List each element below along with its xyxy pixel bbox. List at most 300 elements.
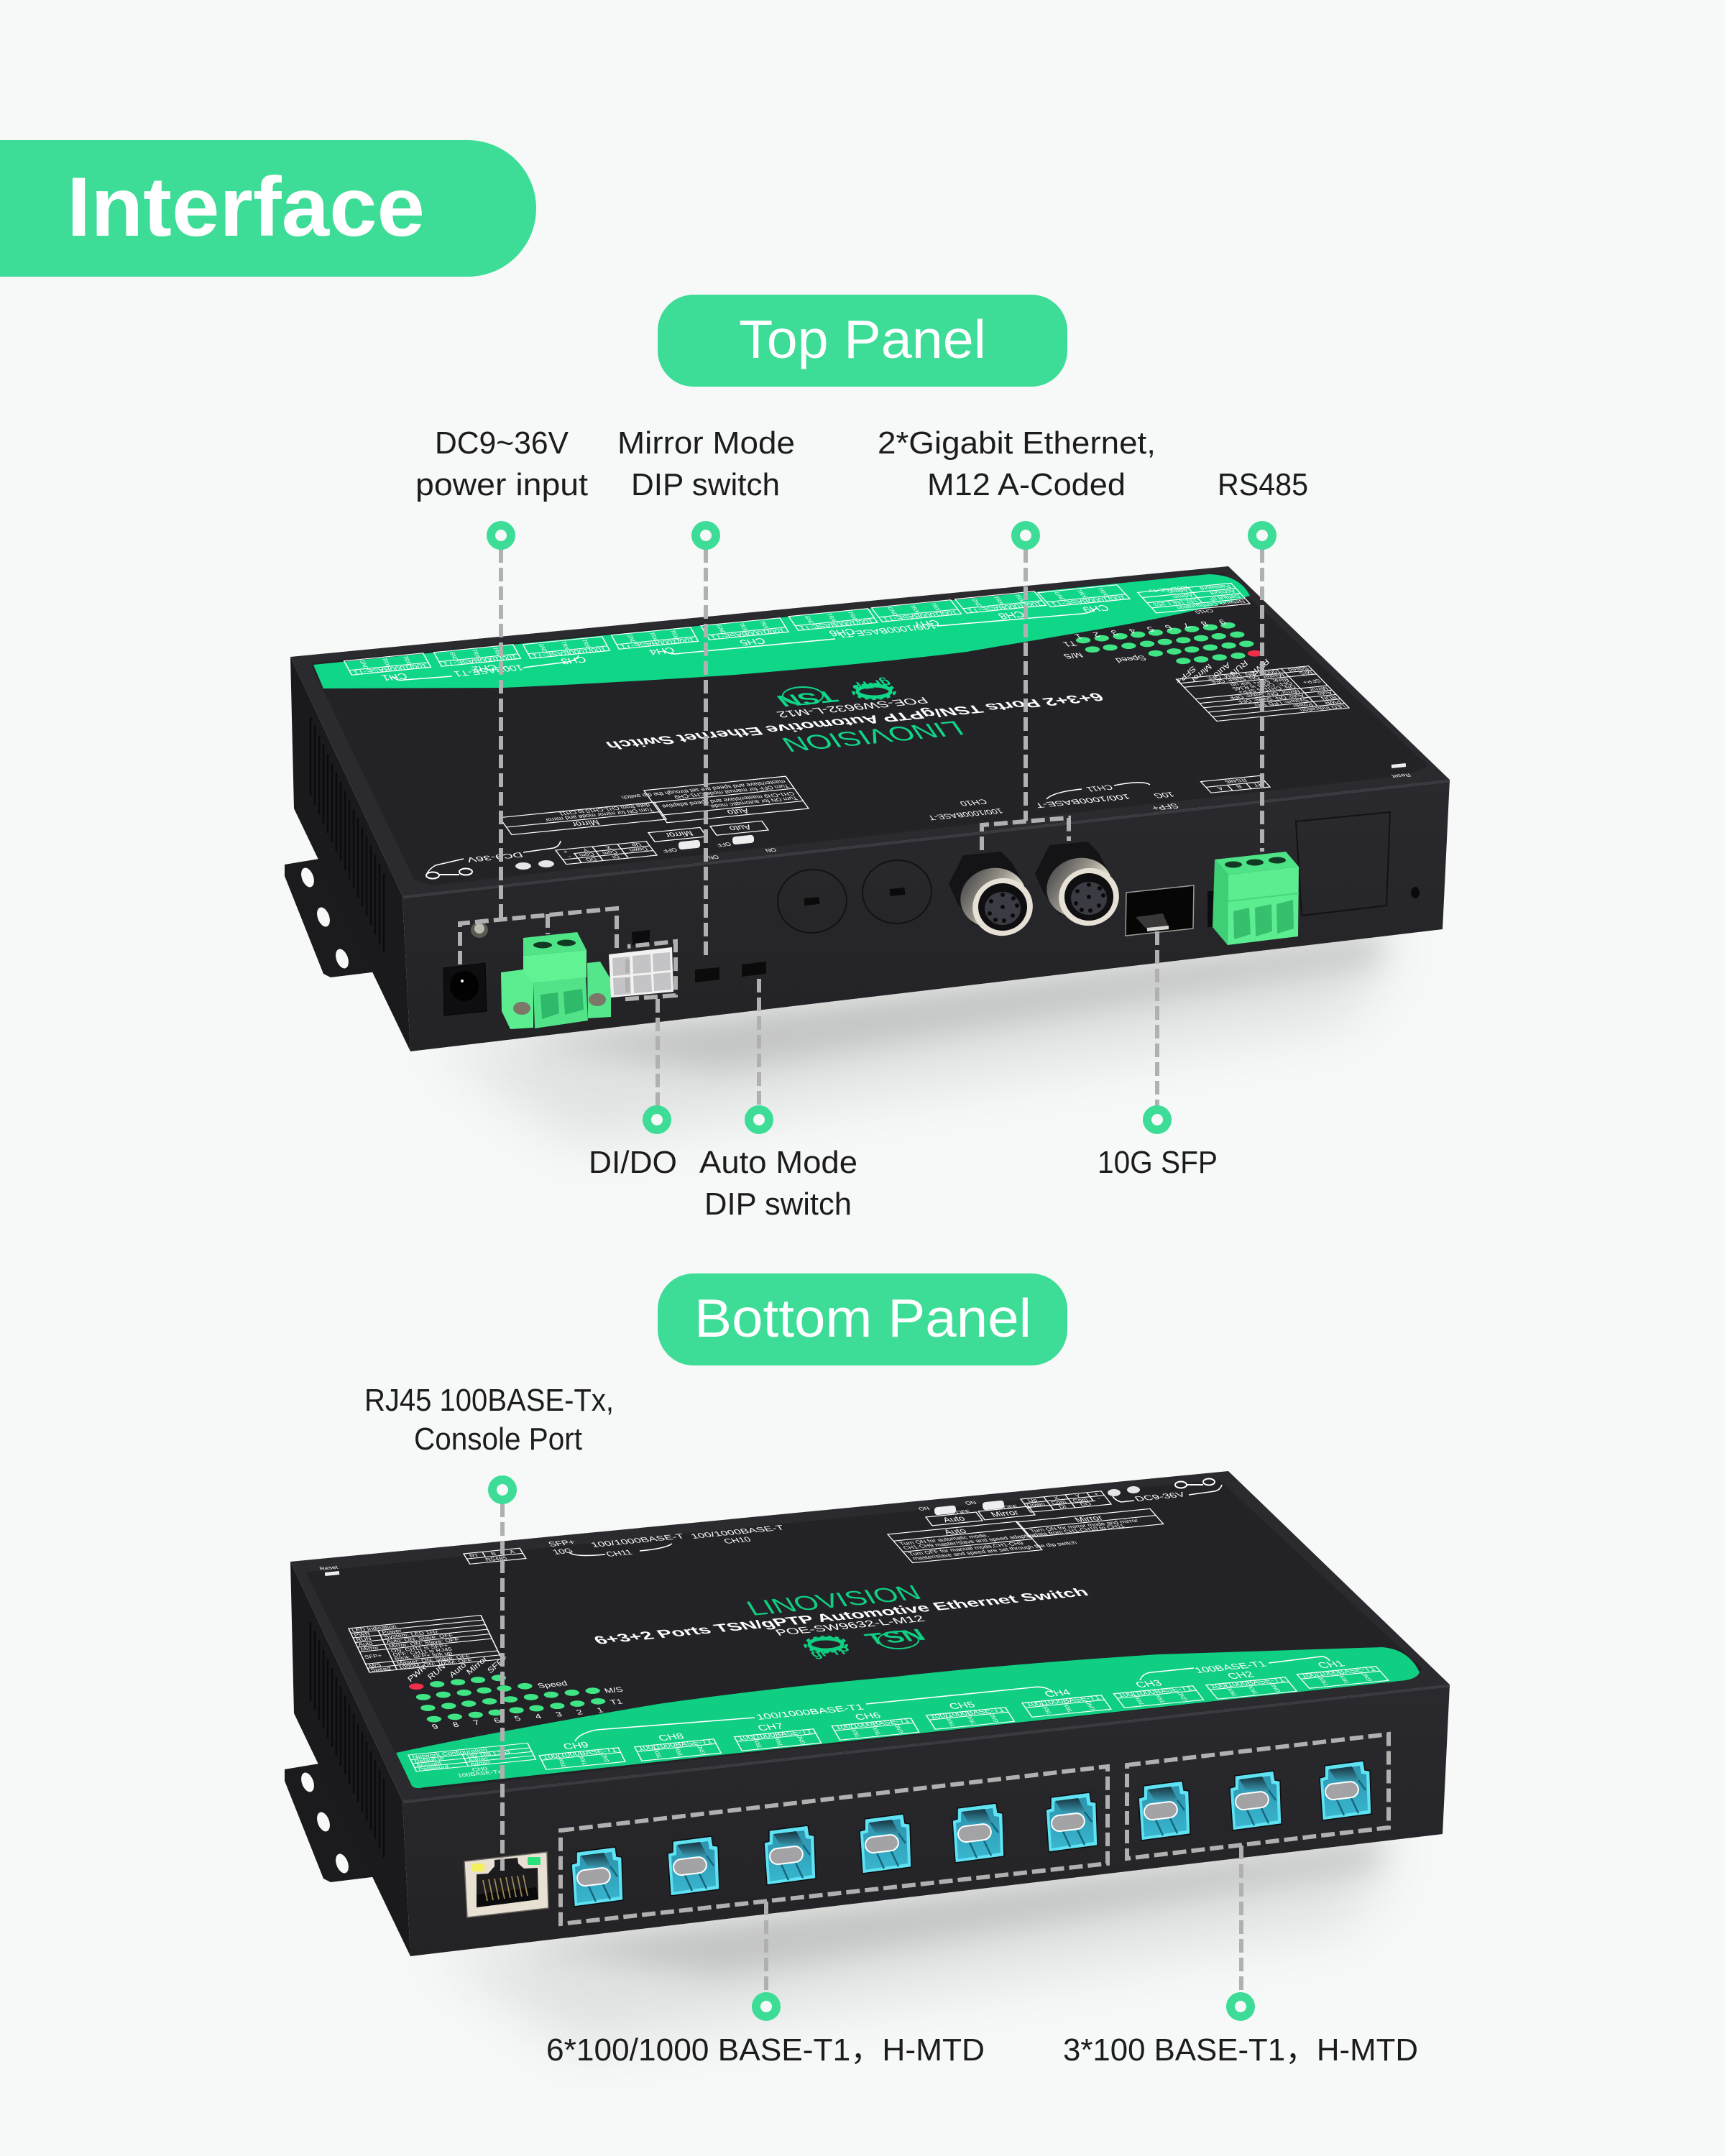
power polarity symbol <box>426 868 472 878</box>
CH6: 100/1000BASE-T1 <box>834 1718 911 1731</box>
CH8: TRX+ <box>1013 594 1029 605</box>
LED indication table: Blink: SFP+ link up <box>1228 677 1291 688</box>
CH3: TRX+ <box>580 639 593 650</box>
side face with vents <box>290 1562 410 1956</box>
DI/DO terminal table: X <box>604 845 612 850</box>
terminal dots <box>515 860 554 870</box>
RS485 table <box>1201 775 1270 793</box>
floor shadow <box>431 934 1402 1143</box>
CH4: 100/1000BASE-T1 <box>619 636 696 650</box>
label: 2*Gigabit Ethernet, M12 A-Coded: M12 A-Coded <box>927 467 1126 502</box>
LED indication table: Mirror <box>359 1644 380 1651</box>
tag: Mirror: Mirror <box>988 1508 1021 1519</box>
H-MTD connector CH1 <box>1320 1761 1371 1820</box>
CH9: CH9 <box>562 1741 590 1751</box>
Mirror table: data from CH1-CH10 to CH11 <box>558 802 652 816</box>
text: CH0 100BASE-Tx: CH0 <box>471 1766 489 1772</box>
CH7 <box>729 1719 821 1751</box>
DI/DO terminal table: DO <box>1079 1501 1093 1507</box>
RS485 table: RS485 <box>1223 778 1248 784</box>
CH6 <box>826 1708 919 1740</box>
dashed box: DI/DO <box>627 941 676 999</box>
CH8 <box>629 1729 721 1761</box>
CH4: TRX+ <box>668 630 681 641</box>
LED indication table: PWR <box>353 1631 371 1638</box>
band brace: 100/1000BASE-T1: 100/1000BASE-T1 <box>835 621 939 639</box>
LED indication table: RUN <box>355 1636 372 1642</box>
CH8 <box>955 591 1054 623</box>
text: 100/1000BASE-T ports: CH10 <box>722 1536 753 1545</box>
CH9: TRX+ <box>556 1756 568 1767</box>
H-MTD connector CH9 <box>571 1847 623 1907</box>
DI/DO terminal table: DO <box>584 857 598 862</box>
title banner: Interface: Interface <box>67 160 425 254</box>
CH2: TRX- <box>470 649 483 659</box>
DI/DO terminal table: Com <box>1071 1497 1090 1503</box>
label: DI/DO: DI/DO <box>589 1145 677 1180</box>
power label: DC9-36V <box>427 841 561 874</box>
dashed bracket: M12 <box>982 818 1069 850</box>
CH9: TRX+ <box>1095 587 1112 599</box>
heading: Bottom Panel <box>658 1273 1067 1365</box>
text: 100/1000BASE-T ports: 100/1000BASE-T <box>1033 793 1133 810</box>
product title: 6+3+2 Ports TSN/gPTP Automotive Ethernet Switch <box>590 1585 1092 1646</box>
icon: gPTP: gPTP <box>807 1645 855 1659</box>
H-MTD connector CH8 <box>668 1836 719 1896</box>
LED indication table: Master: ON; Slave: OFF <box>1208 673 1287 685</box>
label: Mirror Mode DIP switch <box>617 425 795 502</box>
blank panel pegs <box>804 887 1420 906</box>
LED number labels: 987654321 <box>431 1706 605 1731</box>
text: ON OFF: ON <box>964 1500 978 1506</box>
text: ON OFF: OFF <box>1002 1503 1019 1510</box>
LED indication table: System: LED 1Hz <box>1252 698 1310 708</box>
CH7: TRX+ <box>929 602 944 614</box>
text: SFP+ 10G: 10G <box>551 1547 575 1556</box>
LED status labels: PWR <box>1248 657 1271 678</box>
dot: Mirror <box>696 525 716 545</box>
CH7: TRX- <box>908 604 922 614</box>
Auto table: CH1-CH9 master/slave and speed adaptive <box>661 791 796 809</box>
CH5: GND <box>988 1713 1000 1723</box>
leader: console port <box>500 1503 505 1871</box>
network configuration table <box>1138 583 1255 618</box>
network configuration table <box>408 1743 536 1772</box>
title banner: Interface <box>0 140 536 277</box>
LED row label: Speed: Speed <box>536 1680 569 1690</box>
text: ON OFF: OFF <box>954 1508 972 1515</box>
text: SFP+ 10G: SFP+ <box>1149 802 1181 812</box>
CH8: CH8 <box>657 1731 686 1743</box>
text: ON OFF: OFF <box>661 847 678 854</box>
label: 3*100 BASE-T1, H-MTD: 3*100 BASE-T1，H-MTD <box>1063 2032 1418 2068</box>
text: 100/1000BASE-T ports: 100/1000BASE-T <box>589 1532 686 1549</box>
power label: DC9-36V: DC9-36V <box>464 851 525 864</box>
LED indication table: Mirror: ON; Slave: OFF <box>387 1636 460 1649</box>
port: power terminal block <box>501 932 611 1029</box>
label: Mirror Mode DIP switch: Mirror Mode <box>617 425 795 461</box>
H-MTD connector CH6 <box>860 1814 911 1874</box>
label: DC9~36V power input: power input <box>415 467 588 502</box>
CH2: TRX- <box>1246 1685 1260 1695</box>
CH7 <box>871 600 969 632</box>
dashed bracket: power <box>460 908 617 964</box>
LED status labels: RUN <box>1228 658 1249 678</box>
H-MTD connector CH4 <box>1046 1792 1098 1852</box>
CH1: TRX- <box>380 658 393 668</box>
CH9 <box>1038 585 1139 617</box>
leader: RS485 <box>1260 549 1264 852</box>
text: 100/1000BASE-T ports: 100/1000BASE-T <box>926 807 1006 822</box>
label: DC9~36V power input: DC9~36V <box>435 425 569 461</box>
heading: Top Panel <box>658 295 1067 387</box>
CH7: GND <box>795 1734 807 1744</box>
LED indication table: RUN <box>1319 695 1338 701</box>
LED matrix <box>409 1674 605 1722</box>
dot: M12 <box>1016 525 1036 545</box>
network configuration table: CH10 <box>1193 608 1215 614</box>
DI/DO terminal table: X <box>1052 1495 1061 1501</box>
Auto table: Turn ON for automatic mode, <box>707 796 799 809</box>
DI/DO terminal table: DI <box>1057 1503 1068 1509</box>
dot: six ports <box>756 1996 776 2017</box>
CH3: TRX- <box>559 641 572 651</box>
LED indication table: Power <box>1291 702 1315 709</box>
label: RJ45 100BASE-Tx, Console Port: RJ45 100BASE-Tx, <box>364 1383 614 1418</box>
Auto table: CH1-CH9 master/slave and speed adaptive <box>901 1532 1037 1551</box>
LED indication table: Auto: ON; Slave: OFF <box>385 1632 454 1644</box>
CH9: CH9 <box>1080 603 1112 614</box>
DI/DO terminal table: Up <box>630 842 643 848</box>
DI/DO terminal table: DI <box>610 854 621 860</box>
leader: six ports <box>764 1902 768 2007</box>
LED indication table: SFP+ <box>363 1653 383 1659</box>
CH1: 100/1000BASE-T1 <box>351 662 428 676</box>
network configuration table: Network Configuration <box>1174 599 1247 610</box>
channel labels <box>535 1657 1389 1769</box>
CH4: GND <box>625 634 638 644</box>
RS485 table: RT <box>1251 782 1265 788</box>
CH5: CH5 <box>737 636 768 647</box>
RS485 table: RS485 <box>484 1555 508 1562</box>
LED status labels: RUN <box>426 1662 447 1682</box>
text: SFP+ 10G: SFP+ <box>547 1539 577 1548</box>
tag: Auto: Auto <box>940 1514 967 1524</box>
dot: SFP <box>1147 1110 1167 1130</box>
LED indication table: Mirror <box>1307 686 1330 692</box>
switch icon: Auto <box>934 1505 957 1516</box>
Mirror table <box>499 801 666 835</box>
grounding screw <box>471 922 488 938</box>
top face <box>290 566 1450 896</box>
tag: Mirror <box>648 827 707 842</box>
CH4: TRX- <box>648 632 661 642</box>
CH1: GND <box>358 660 370 670</box>
power label: DC9-36V: DC9-36V <box>1132 1491 1187 1503</box>
power polarity symbol <box>1175 1479 1215 1488</box>
heading: Top Panel: Top Panel <box>739 309 986 369</box>
network configuration table: Default IP <box>1208 594 1242 602</box>
CH7: TRX- <box>772 1736 785 1746</box>
band brace: 100/1000BASE-T1 <box>575 1687 1053 1741</box>
DI/DO terminal table: - <box>567 854 573 859</box>
LED status labels: SFP+ <box>486 1653 510 1675</box>
network configuration table: 192.168.1.253 <box>465 1750 512 1759</box>
CH3: GND <box>1175 1691 1190 1701</box>
text: ON OFF: ON <box>764 847 778 853</box>
LED status labels: Mirror <box>465 1654 489 1677</box>
DI/DO terminal table: Y <box>581 847 589 853</box>
CH4: 100/1000BASE-T1 <box>1024 1695 1102 1708</box>
icon: gPTP <box>805 1637 855 1659</box>
leader: Mirror Mode DIP <box>704 549 708 958</box>
label: Auto Mode DIP switch: Auto Mode <box>699 1145 857 1180</box>
label plate <box>309 1482 1420 1788</box>
CH8: TRX- <box>673 1746 685 1756</box>
LED status labels: PWR <box>406 1662 428 1684</box>
icon: TSN: TSN <box>860 1626 930 1649</box>
icon: gPTP: gPTP <box>847 677 896 692</box>
CH7: 100/1000BASE-T1 <box>737 1728 814 1742</box>
CH6: TRX- <box>870 1726 883 1736</box>
text: 100BASE-Tx: 100BASE-Tx <box>1146 585 1191 594</box>
network configuration table: 192.168.1.253 <box>1151 598 1200 607</box>
text: SFP+ 10G <box>1149 791 1181 812</box>
front face <box>402 780 1450 1051</box>
tag: Auto: Auto <box>727 823 753 833</box>
LED status labels: Auto <box>448 1660 468 1680</box>
LED indication table: Speed <box>1286 665 1310 673</box>
label plate <box>313 575 1425 883</box>
LED indication table: Mirror: ON; Slave: OFF <box>1227 688 1302 701</box>
LED status labels <box>1174 657 1271 686</box>
callouts: top panel leaders <box>460 525 1272 1130</box>
CH4 <box>1015 1685 1111 1717</box>
icon: TSN: TSN <box>772 687 842 710</box>
band brace: 100/1000BASE-T1 <box>664 607 1097 654</box>
port: RJ45 console <box>464 1852 548 1917</box>
CH9: 100/1000BASE-T1 <box>541 1747 618 1761</box>
text: ON OFF: ON <box>917 1506 931 1511</box>
Auto table: Turn OFF for manual mode,CH1-CH9 <box>907 1540 1025 1557</box>
text: 100/1000BASE-T ports: CH11 <box>604 1549 634 1558</box>
label: Mirror Mode DIP switch: DIP switch <box>631 467 780 502</box>
CH7: TRX+ <box>751 1737 764 1749</box>
LED status labels <box>406 1653 510 1684</box>
LED matrix <box>1076 622 1262 664</box>
label: Auto Mode DIP switch: DIP switch <box>704 1187 852 1222</box>
port: M12 connector 2 <box>1035 842 1126 933</box>
blank panel outlines <box>775 812 1390 936</box>
CH2: GND <box>1268 1682 1282 1692</box>
CH5: 100/1000BASE-T1 <box>709 627 786 640</box>
CH6: GND <box>803 615 816 625</box>
CH5: 100/1000BASE-T1 <box>929 1707 1006 1720</box>
DI/DO terminal table: Com <box>601 849 619 856</box>
CH5 <box>920 1697 1014 1729</box>
LED indication table: SFP+ <box>1301 678 1322 685</box>
DIP switch: Mirror <box>695 967 719 982</box>
Mirror table: Mirror <box>1072 1514 1105 1524</box>
LED indication table: Master: ON; Slave: OFF <box>395 1653 472 1666</box>
tag: Mirror: Mirror <box>663 829 695 839</box>
product title: 6+3+2 Ports TSN/gPTP Automotive Ethernet Switch <box>602 691 1108 752</box>
tag: Auto <box>710 821 768 835</box>
text: ON OFF: ON <box>707 854 720 860</box>
text: ON OFF <box>661 842 778 860</box>
CH5 <box>701 618 795 650</box>
CH5: TRX+ <box>758 620 772 632</box>
LED indication table: OFF: CH11 is RJ45 <box>1230 681 1294 691</box>
product model: POE-SW9632-L-M12 <box>774 695 931 719</box>
network configuration table: Account <box>415 1761 443 1768</box>
port: DI/DO white connector <box>609 930 673 998</box>
LED indication table: 1000M: ON; 100M: OFF <box>397 1657 473 1670</box>
Mirror table: Turn ON for mirror mode and mirror <box>1028 1518 1140 1534</box>
CH3: 100/1000BASE-T1 <box>530 645 607 659</box>
CH3 <box>523 637 615 668</box>
LED status labels: SFP+ <box>1174 664 1197 686</box>
Mirror table: Turn ON for mirror mode and mirror <box>544 807 655 823</box>
CH9: GND <box>599 1753 611 1763</box>
LED number labels: 123456789 <box>1072 618 1228 640</box>
CH5: TRX+ <box>943 1715 957 1727</box>
CH6: CH6 <box>827 627 857 637</box>
CH1: TRX+ <box>1315 1674 1331 1686</box>
green band <box>396 1647 1420 1788</box>
tag: Auto <box>926 1512 983 1526</box>
product logo: LINOVISION: LINOVISION <box>742 1581 926 1620</box>
dot: RS485 <box>1252 525 1272 545</box>
leader: three ports <box>1239 1846 1243 2007</box>
text: SFP+ 10G: 10G <box>1151 791 1177 800</box>
CH5: TRX- <box>737 622 750 632</box>
front top edge highlight <box>402 1686 1450 1802</box>
dot: Auto <box>749 1110 769 1130</box>
CH5: GND <box>715 625 727 635</box>
band brace: 100BASE-T1: 100BASE-T1 <box>1192 1660 1269 1675</box>
LED indication table: OFF: CH11 is RJ45 <box>392 1646 454 1657</box>
CH2: TRX+ <box>491 647 504 658</box>
DI/DO terminal table: + <box>1092 1491 1100 1497</box>
DI/DO terminal table <box>1021 1491 1111 1512</box>
DI/DO terminal table: Com <box>1049 1499 1068 1506</box>
LED indication table <box>1176 665 1349 722</box>
dashed box: three H-MTD ports <box>1127 1734 1389 1858</box>
Auto table: master/slave and speed are set through the dip switch <box>911 1539 1078 1561</box>
CH8: TRX- <box>992 596 1006 606</box>
CH4: CH4 <box>647 645 676 657</box>
CH9: TRX- <box>1075 589 1090 599</box>
LED indication table: LED Indication <box>351 1623 397 1633</box>
leader: SFP <box>1155 931 1159 1120</box>
LED row label: Speed: Speed <box>1113 654 1149 664</box>
Auto table: master/slave and speed are set through the dip switch <box>620 778 787 801</box>
label: 2*Gigabit Ethernet, M12 A-Coded <box>878 425 1156 502</box>
CH9: 100/1000BASE-T1 <box>1049 594 1128 608</box>
CH4 <box>612 627 704 659</box>
CH8: CH8 <box>995 609 1027 620</box>
network configuration table: Password <box>418 1764 449 1772</box>
CH6: CH6 <box>853 1710 883 1722</box>
dashed box: six H-MTD ports <box>561 1766 1108 1924</box>
Auto table: Turn ON for automatic mode, <box>898 1532 990 1547</box>
dot: power <box>491 525 511 545</box>
icon: gPTP <box>847 677 896 699</box>
port: 10G SFP cage <box>1126 885 1194 936</box>
device: top panel view <box>285 566 1450 1143</box>
Auto table <box>888 1517 1080 1563</box>
LED indication table: M/S <box>1297 670 1315 676</box>
RS485 table: B <box>1234 784 1243 789</box>
band brace: 100/1000BASE-T1: 100/1000BASE-T1 <box>755 1703 866 1722</box>
DIP switch: Auto <box>742 962 766 977</box>
CH9: GND <box>1052 591 1067 602</box>
network configuration table: Admin <box>469 1760 491 1766</box>
CH2: GND <box>448 651 460 661</box>
front top edge highlight <box>402 781 1450 898</box>
LED indication table: LED Indication <box>1298 704 1347 713</box>
network configuration table: Default IP <box>413 1756 446 1764</box>
CH2: CH2 <box>1225 1670 1256 1681</box>
CH6: GND <box>893 1723 905 1733</box>
power label: DC9-36V <box>1113 1485 1222 1503</box>
LED indication table: Power <box>381 1628 402 1635</box>
leader: M12 <box>1024 549 1028 821</box>
text: 100/1000BASE-T ports: CH10 <box>958 798 990 808</box>
CH1: GND <box>1359 1672 1374 1682</box>
leader: DI/DO <box>656 999 660 1120</box>
label: DC9~36V power input <box>415 425 588 502</box>
top face <box>290 1471 1450 1801</box>
mounting bracket <box>285 1763 377 1882</box>
switch icon: Auto <box>732 834 755 845</box>
LED indication table: Auto <box>357 1640 374 1647</box>
CH4: TRX+ <box>1039 1703 1054 1715</box>
DI/DO terminal table: Down <box>627 846 649 853</box>
text: 100/1000BASE-T ports <box>569 1524 786 1558</box>
text: 100/1000BASE-T ports: 100/1000BASE-T <box>689 1524 786 1540</box>
Auto table: Turn OFF for manual mode,CH1-CH9 <box>673 783 791 800</box>
LED indication table: Speed <box>369 1665 392 1673</box>
LED row label: M/S: M/S <box>1061 651 1085 660</box>
CH8: 100/1000BASE-T1 <box>965 600 1044 614</box>
CH1: TRX- <box>1336 1674 1352 1684</box>
product model: POE-SW9632-L-M12 <box>773 1613 927 1638</box>
LED indication table: Auto: ON; Slave: OFF <box>1235 693 1306 704</box>
LED indication table: System: LED 1Hz <box>383 1629 439 1639</box>
CH1 <box>1288 1657 1389 1688</box>
CH6: TRX- <box>825 613 839 623</box>
green band <box>313 574 1250 688</box>
port: M12 connector 1 <box>949 852 1039 943</box>
heading: Bottom Panel: Bottom Panel <box>694 1288 1031 1348</box>
leader: Auto Mode DIP <box>757 979 761 1120</box>
RS485 table: A <box>1215 786 1225 791</box>
reset label <box>1389 763 1412 779</box>
LED row label: M/S: M/S <box>603 1685 625 1695</box>
CH3: GND <box>537 643 549 653</box>
CH9: TRX- <box>577 1755 589 1765</box>
CH2: 100/1000BASE-T1 <box>441 653 518 667</box>
CH8: 100/1000BASE-T1 <box>637 1738 714 1752</box>
tag: Mirror <box>978 1506 1035 1520</box>
network configuration table: Admin <box>1171 593 1195 599</box>
CH7: CH7 <box>756 1721 786 1733</box>
CH4: GND <box>1083 1700 1097 1710</box>
CH2: CH2 <box>469 663 499 674</box>
CH2 <box>1198 1667 1297 1699</box>
